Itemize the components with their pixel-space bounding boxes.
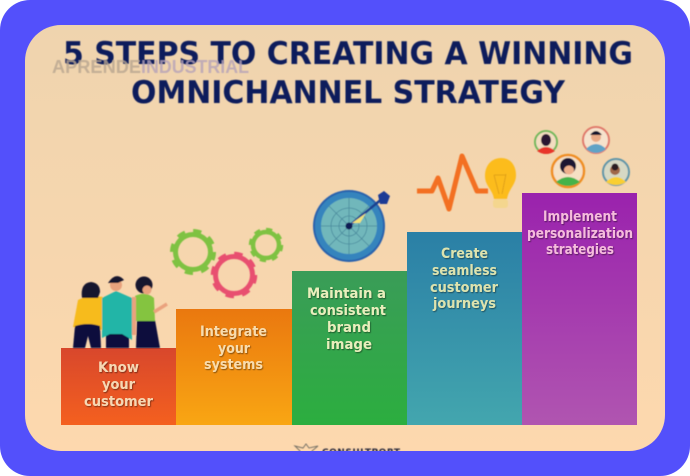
title: 5 STEPS TO CREATING A WINNING: [63, 36, 633, 72]
title: OMNICHANNEL STRATEGY: [131, 75, 566, 111]
footer logo clipped by frame: CONSULTPORT: [322, 448, 401, 458]
title: [63, 36, 633, 111]
step 4 bar: create seamless customer journeys: journeys: [432, 296, 496, 312]
step 2 bar: integrate your systems: systems: [204, 357, 263, 373]
step 3 bar: maintain a consistent brand image: brand: [327, 320, 371, 336]
icon: gears: [172, 230, 282, 296]
step 5 bar: implement personalization strategies: Implement: [543, 209, 617, 225]
step 5 bar: implement personalization strategies: personalization: [527, 226, 633, 242]
avatar: top left: [535, 131, 557, 154]
gear: green small: [250, 230, 282, 260]
step 3 bar: maintain a consistent brand image: [292, 271, 407, 425]
step 1 bar: know your customer: your: [102, 377, 135, 393]
watermark: INDUSTRIAL: [141, 57, 249, 77]
watermark: APRENDE: [52, 57, 141, 77]
step 3 bar: maintain a consistent brand image: image: [326, 337, 372, 353]
icon: three people: [73, 276, 167, 348]
step 2 bar: integrate your systems: [176, 309, 292, 425]
step 5 bar: implement personalization strategies: [522, 193, 637, 425]
icon: light bulb: [485, 158, 516, 208]
avatar: top right: [583, 127, 609, 153]
step 4 bar: create seamless customer journeys: [407, 232, 522, 425]
gear: pink: [213, 254, 255, 296]
step 3 bar: maintain a consistent brand image: Maintain a: [307, 286, 386, 302]
step 1 bar: know your customer: customer: [84, 394, 153, 410]
icon: pulse line: [417, 156, 488, 209]
avatar: right: [603, 159, 629, 185]
step 2 bar: integrate your systems: your: [218, 341, 250, 357]
icon: customer avatars: [535, 127, 629, 187]
step 4 bar: create seamless customer journeys: customer: [430, 280, 498, 296]
step 5 bar: implement personalization strategies: strategies: [546, 242, 614, 258]
step 2 bar: integrate your systems: Integrate: [200, 324, 267, 340]
step 4 bar: create seamless customer journeys: seamless: [432, 263, 497, 279]
watermark: [52, 57, 249, 77]
footer logo clipped by frame: [293, 443, 401, 451]
icon: dartboard: [313, 190, 390, 262]
gear: green large: [172, 232, 214, 272]
step 1 bar: know your customer: [61, 348, 176, 425]
step 3 bar: maintain a consistent brand image: consistent: [310, 303, 386, 319]
step 4 bar: create seamless customer journeys: Create: [441, 246, 488, 262]
step 1 bar: know your customer: Know: [98, 360, 139, 376]
avatar: centre: [552, 155, 584, 187]
